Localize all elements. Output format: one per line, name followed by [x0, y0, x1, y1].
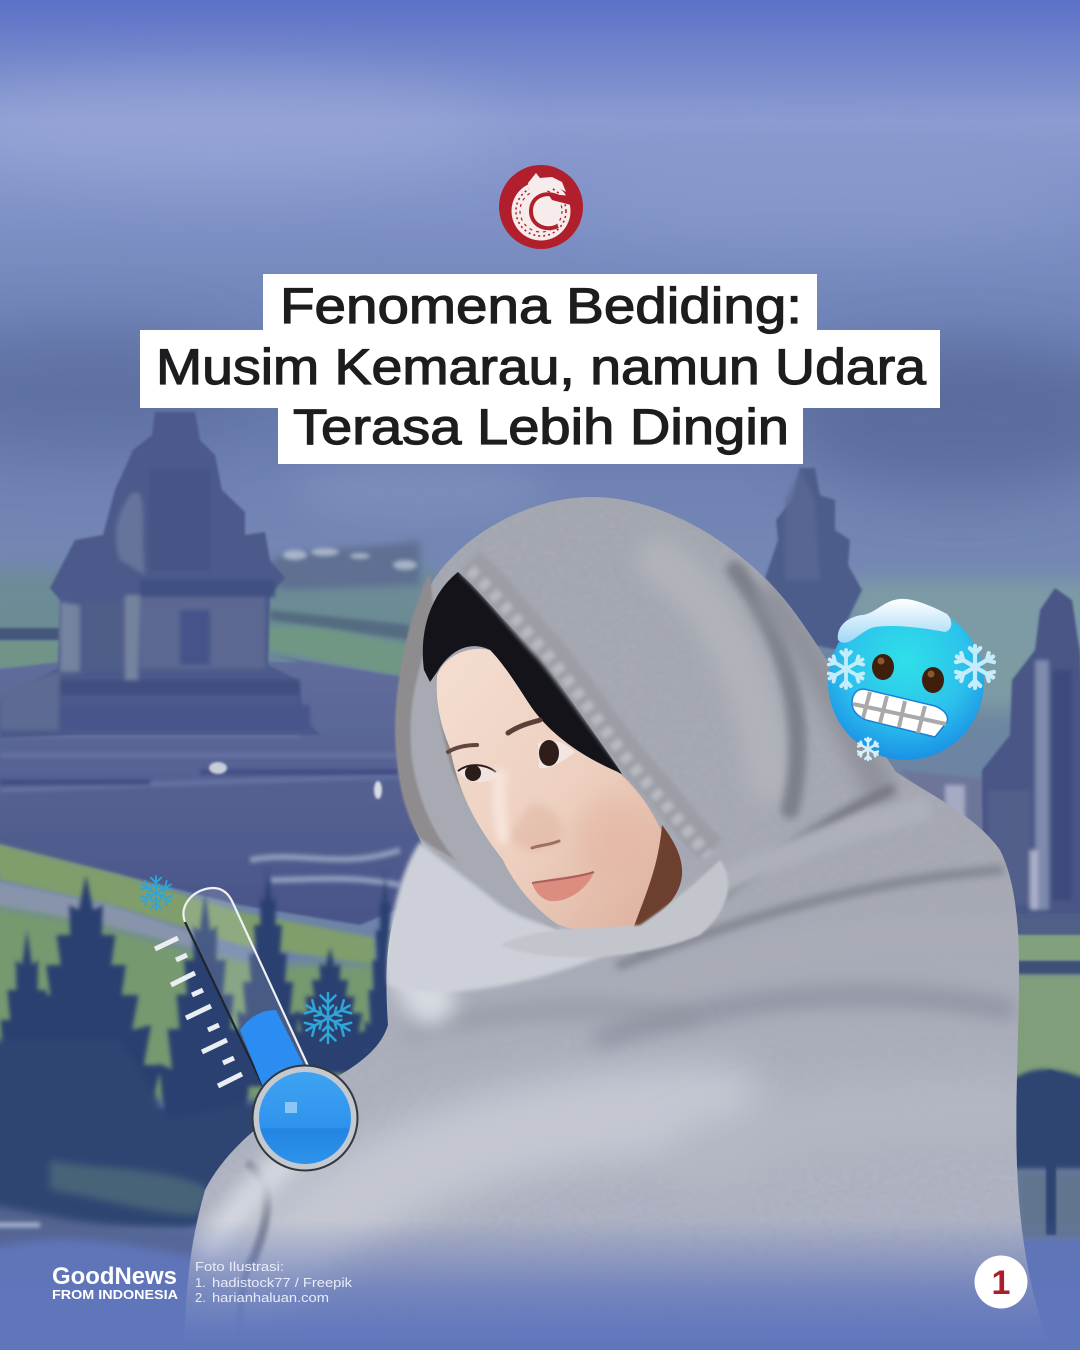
blanket folds [210, 560, 1010, 1350]
blanket silhouette [185, 497, 1052, 1350]
title: Terasa Lebih Dingin [293, 399, 789, 455]
scarf under chin [388, 842, 650, 992]
snowflakes [139, 876, 173, 910]
person wrapped in blanket [185, 497, 1052, 1350]
gap under beak [548, 194, 573, 205]
emblem ring [512, 182, 570, 240]
brand logo text [52, 1263, 178, 1302]
face features: brows, eyes, nose, lips [448, 720, 644, 901]
scale ticks [155, 938, 242, 1086]
letter G [531, 194, 559, 228]
title [140, 274, 940, 464]
side hair strand [632, 825, 682, 932]
glass tube [183, 888, 308, 1086]
blanket fold at chin [500, 860, 728, 957]
blue column [240, 1010, 308, 1092]
background landscape [0, 540, 1080, 1100]
brand logo text: GoodNews [52, 1263, 177, 1290]
tree base and far shoreline [0, 1040, 1080, 1350]
photo credits: hadistock77 / Freepik [212, 1275, 353, 1290]
background pine trees [0, 868, 409, 1160]
eagle head [528, 173, 566, 196]
brand logo text: FROM INDONESIA [52, 1288, 178, 1302]
bottom colour fade [0, 1220, 1080, 1350]
icon: thermometer [139, 876, 358, 1170]
photo credits: 2. [195, 1290, 206, 1305]
photo credits: Foto Ilustrasi: [195, 1259, 284, 1274]
bulb [252, 1066, 358, 1170]
title: Musim Kemarau, namun Udara [156, 339, 926, 395]
hood outer rim [395, 573, 490, 880]
hood inner lining [411, 650, 562, 932]
hair [423, 572, 622, 774]
hood rim fringe [470, 562, 712, 856]
photo credits: harianhaluan.com [212, 1290, 329, 1305]
photo credits: 1. [195, 1275, 206, 1290]
background temples right [765, 468, 1080, 915]
title: Fenomena Bediding: [280, 278, 802, 334]
photo credits [195, 1259, 353, 1305]
gritted teeth [852, 689, 948, 737]
face [437, 649, 667, 932]
background temple left [0, 412, 320, 738]
page number badge: 1 [992, 1264, 1010, 1302]
logo badge [499, 165, 583, 249]
page number badge [974, 1256, 1028, 1308]
icon: freezing face emoji [827, 599, 996, 760]
